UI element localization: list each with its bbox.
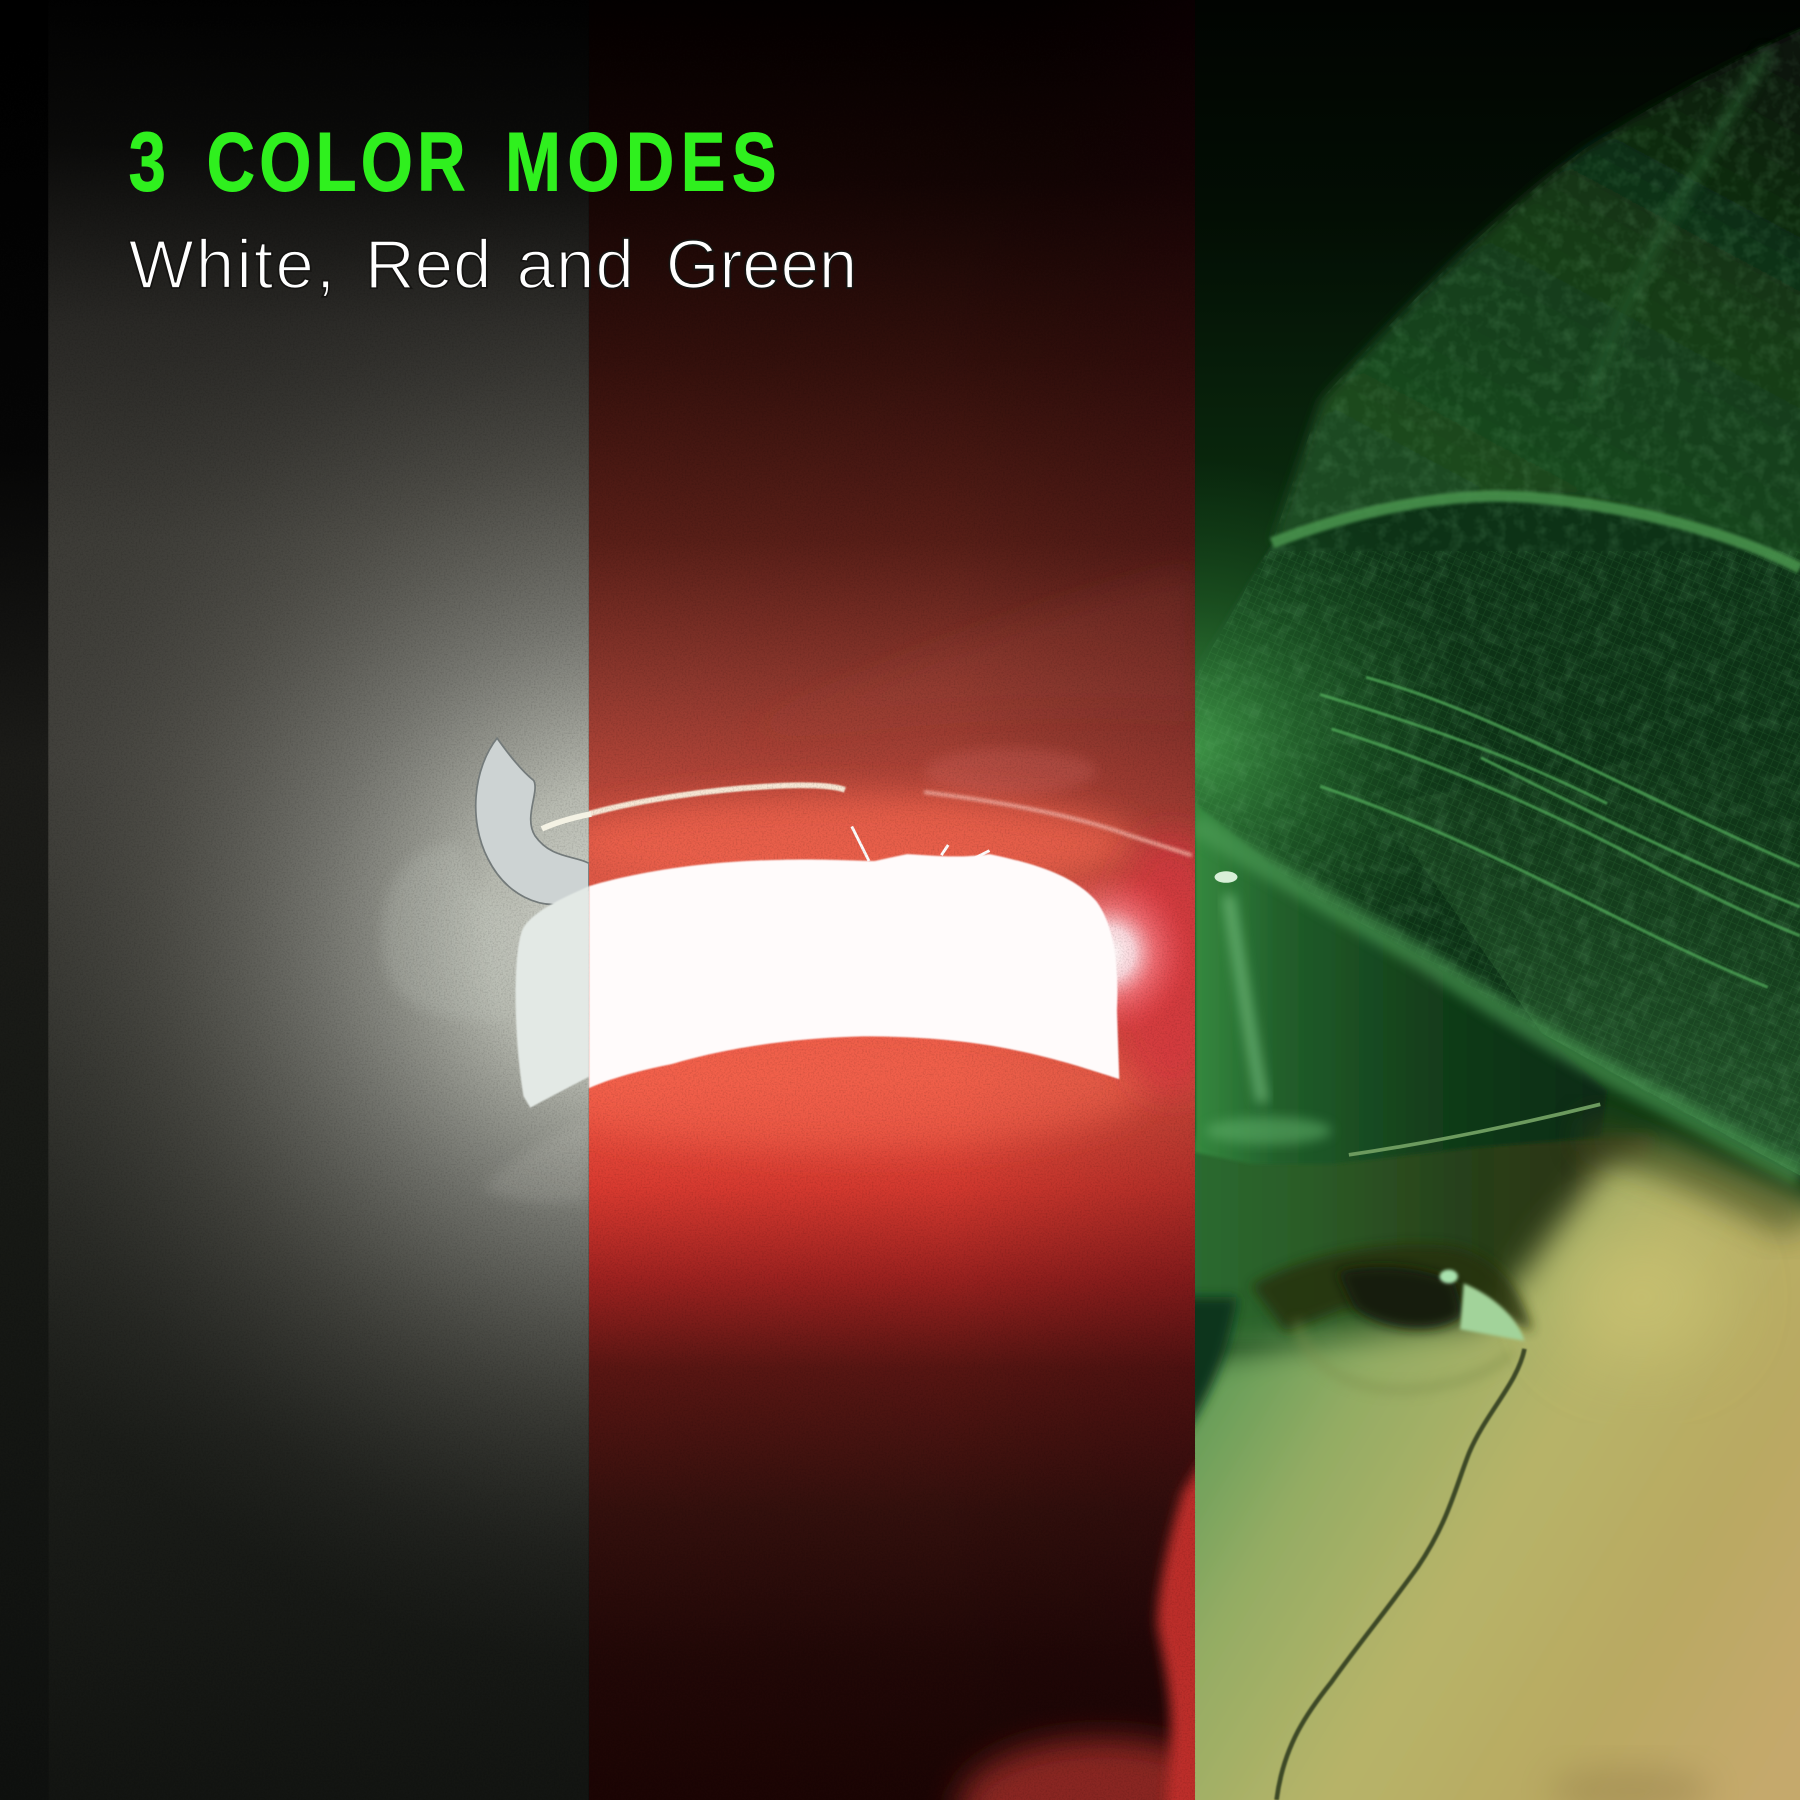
subtitle: and [517,226,635,303]
ghost clip reflection [384,854,454,1008]
eye socket lower lid [1297,1320,1513,1390]
dark green left edge [1182,1297,1238,1437]
left edge strip [0,479,48,1800]
title: COLOR [207,115,470,209]
hat ghost sweep [1007,582,1188,682]
right side shading [963,440,1195,1448]
cap visor [1195,496,1800,1217]
left highlighted wire [589,785,845,814]
strap highlight edge [1228,895,1263,1102]
light glow [54,340,589,1550]
right dim wire [924,792,1192,855]
strap top glint [1215,871,1238,883]
brow highlight on skin [1561,1234,1722,1360]
crown seam [1590,52,1768,402]
crimson side glow [1118,824,1195,1093]
visor right lighter zone [1378,735,1800,1176]
eye glint [1440,1270,1458,1283]
eye white [1460,1283,1524,1341]
panel: white light mode [0,0,589,1800]
spark hairs on top of band [852,827,990,863]
visor edge highlight [1195,823,1800,1176]
visor stitching streaks [1320,677,1800,987]
film grain [0,0,1195,1800]
reflection on hat [928,750,1093,792]
panel base gradient [1195,0,1800,1800]
panel: red light mode [588,0,1195,1800]
subtitle: Green [666,226,857,303]
red lit skin patch [1157,1456,1217,1800]
cap mesh texture [1195,0,1800,1263]
red lit lower blob [959,1739,1246,1800]
headlamp strap [1195,804,1607,1164]
lower ghost reflection [492,1136,586,1200]
title: MODES [505,115,783,209]
icon: headlamp crescent clip [476,738,589,904]
thin cord [1349,1104,1600,1155]
nose tip shading [1550,1766,1710,1800]
lower glow band [588,1044,1144,1148]
shadow under visor [1584,1131,1800,1223]
glow above band [562,796,1136,892]
subtitle: Red [365,226,491,303]
cap crown [1272,6,1800,597]
eye dark iris [1337,1266,1464,1329]
headlamp band: red side [589,854,1119,1088]
red lamp flare [1080,878,1180,1024]
panel base gradient [48,0,589,1800]
face skin [1148,1148,1800,1800]
strap lower bright spot [1205,1117,1332,1145]
title: 3 [129,115,166,209]
cable on the clip [542,814,591,829]
eye brow shadow [1251,1244,1533,1332]
below-strap shade [1148,1136,1653,1343]
bright ridge [1272,496,1800,568]
headlamp band: white side [516,886,589,1108]
headlamp [476,738,1119,1108]
panel: green light mode [1148,0,1800,1800]
nose edge line [1277,1349,1524,1800]
subtitle: White, [129,226,338,303]
panel base gradient [589,0,1195,1800]
visor left glow [1195,459,1492,1033]
